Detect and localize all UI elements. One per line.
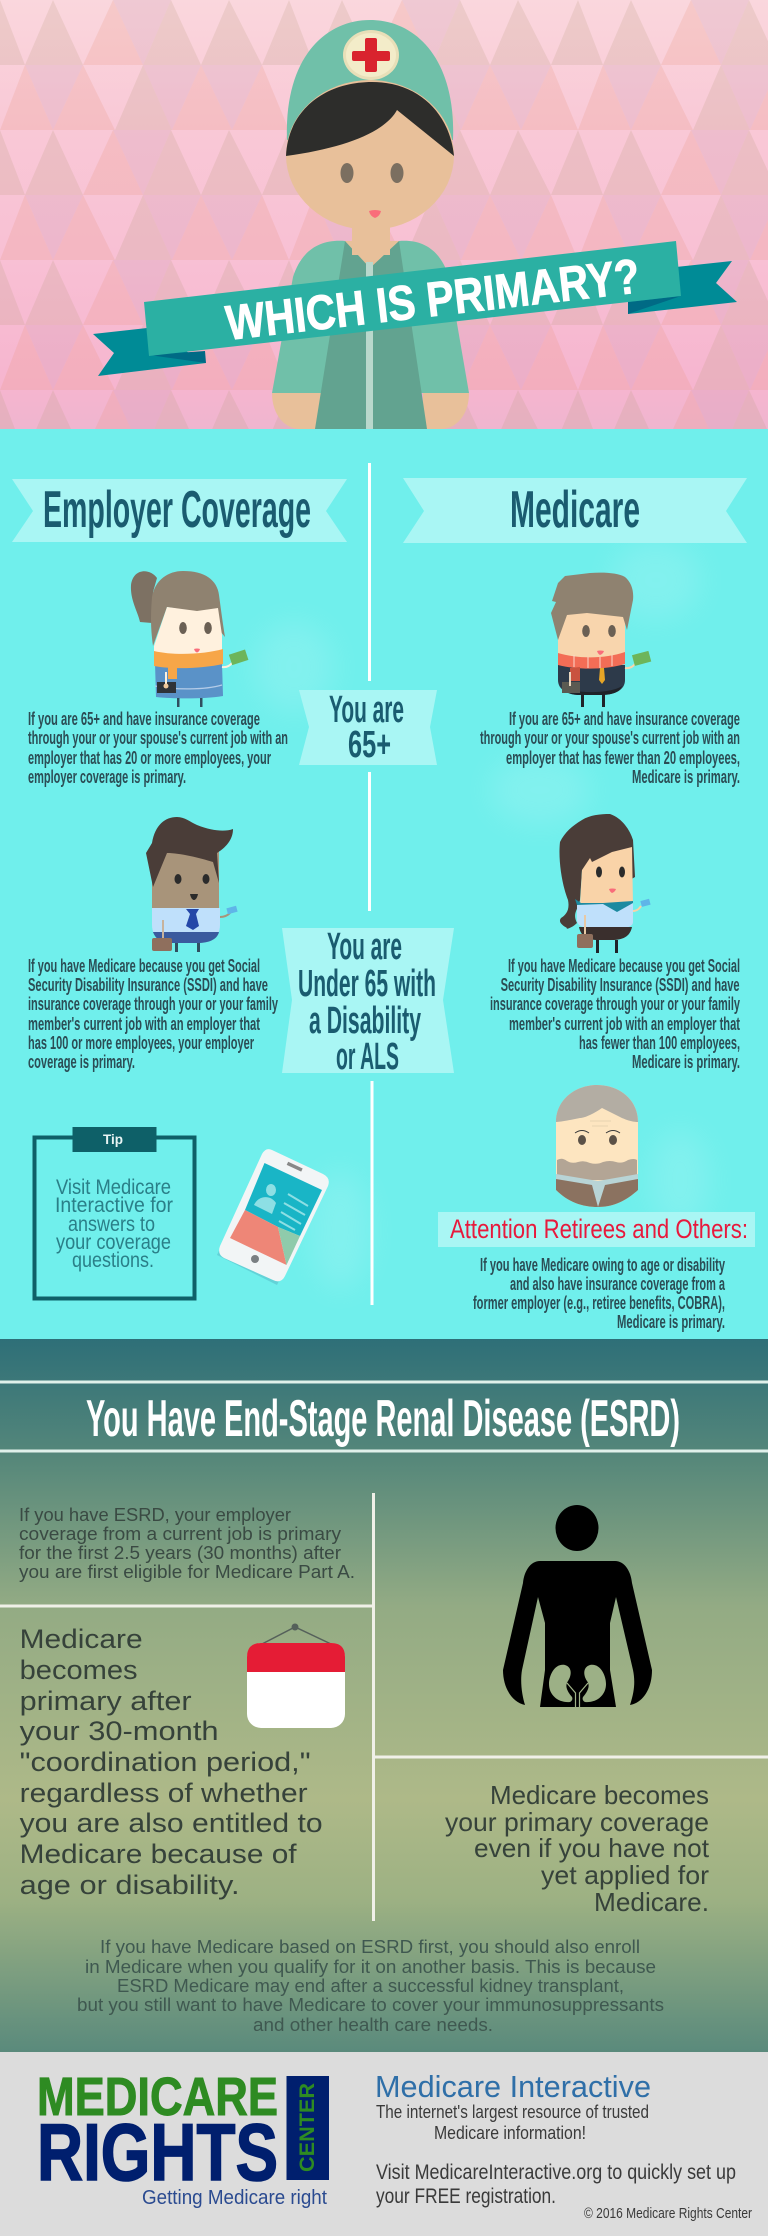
text: coordination period: your 30-month — [20, 1716, 219, 1746]
text: medicare disability — [490, 956, 740, 1072]
text: coordination period: Medicare because of — [20, 1839, 297, 1869]
icon: calendar — [247, 1624, 345, 1728]
label: you are 65+ — [299, 689, 437, 766]
tip box — [34, 1127, 194, 1298]
text: coordination period: Medicare — [20, 1624, 143, 1654]
tip box: questions. — [72, 1249, 154, 1272]
text: ESRD Medicare enrollment note: and other health care needs. — [253, 2015, 493, 2035]
text: ESRD employer coverage — [19, 1505, 355, 1582]
character: older man with beard — [556, 1085, 638, 1207]
text: employer 65+: If you are 65+ and have insurance coverage — [28, 709, 260, 729]
tip box: Interactive for — [55, 1194, 173, 1217]
text: medicare primary even if not applied: your primary coverage — [445, 1807, 709, 1837]
text: ESRD Medicare enrollment note: in Medicare when you qualify for it on another basis. This is because — [85, 1957, 656, 1977]
text: coordination period — [20, 1624, 323, 1900]
text: ESRD Medicare enrollment note: but you still want to have Medicare to cover your immunosuppressants — [77, 1995, 664, 2015]
heading: Medicare Interactive: Medicare Interactive — [375, 2069, 651, 2104]
character: woman with long hair — [559, 814, 651, 953]
logo: Medicare Rights Center — [37, 2067, 329, 2209]
logo: Medicare Rights Center: Getting Medicare right — [142, 2187, 327, 2209]
label: you are 65+: You are — [329, 689, 404, 731]
text: coordination period: "coordination period," — [20, 1747, 311, 1777]
text: medicare primary even if not applied — [445, 1780, 710, 1917]
nurse illustration — [272, 20, 469, 429]
text: medicare primary even if not applied: yet applied for — [541, 1860, 709, 1890]
character: man with tie — [146, 817, 238, 952]
logo: Medicare Rights Center: CENTER — [296, 2083, 319, 2172]
banner: medicare — [403, 478, 747, 543]
text: employer 65+: employer that has 20 or more employees, your — [28, 748, 271, 768]
text: ESRD employer coverage: you are first eligible for Medicare Part A. — [19, 1562, 355, 1582]
text: medicare primary even if not applied: even if you have not — [474, 1833, 710, 1863]
banner: employer coverage — [12, 479, 347, 542]
text: medicare primary even if not applied: Medicare becomes — [490, 1780, 709, 1810]
title ribbon — [93, 241, 737, 376]
text: coordination period: regardless of whether — [20, 1778, 308, 1808]
tip box: your coverage — [56, 1231, 171, 1254]
text: employer 65+: employer coverage is primary. — [28, 767, 186, 787]
hero background — [0, 0, 768, 429]
text: medicare primary even if not applied: Medicare. — [594, 1887, 709, 1917]
banner: employer coverage: Employer Coverage — [43, 481, 311, 539]
tip box: Visit Medicare — [56, 1176, 171, 1199]
panel: footer — [0, 2052, 768, 2236]
label: under 65 with a disability or ALS — [282, 926, 454, 1078]
text: employer 65+: through your or your spouse's current job with an — [28, 728, 288, 748]
text: employer disability: If you have Medicare because you get Social — [28, 956, 260, 976]
text: coordination period: you are also entitled to — [20, 1808, 323, 1838]
label: under 65 with a disability or ALS: a Disability — [309, 1000, 421, 1042]
text: retirees — [473, 1255, 726, 1332]
label: under 65 with a disability or ALS: You are — [327, 926, 402, 968]
character: woman with ponytail — [131, 571, 248, 707]
text: coordination period: primary after — [20, 1686, 192, 1716]
text: footer description: your FREE registration. — [376, 2185, 556, 2208]
text: footer description — [376, 2102, 736, 2208]
logo: Medicare Rights Center: RIGHTS — [37, 2108, 278, 2198]
icon: smartphone — [217, 1149, 329, 1285]
text: employer disability: member's current job with an employer that — [28, 1014, 260, 1034]
text: employer disability: coverage is primary. — [28, 1052, 135, 1072]
text: footer description: The internet's largest resource of trusted — [376, 2102, 649, 2122]
text: employer disability — [28, 956, 278, 1072]
text: medicare 65+ — [480, 709, 740, 787]
logo: Medicare Rights Center: MEDICARE — [37, 2067, 278, 2127]
nurse body — [272, 225, 469, 429]
text: employer 65+ — [28, 709, 288, 787]
tip box: Tip — [103, 1131, 123, 1147]
text: ESRD employer coverage: coverage from a current job is primary — [19, 1524, 341, 1544]
text: coordination period: becomes — [20, 1655, 138, 1685]
character: man with scarf — [551, 573, 651, 707]
panel: ESRD background — [0, 1339, 768, 2052]
label: you are 65+: 65+ — [348, 724, 391, 766]
label: under 65 with a disability or ALS: or ALS — [336, 1036, 399, 1078]
text: employer disability: insurance coverage through your or your family — [28, 994, 278, 1014]
title: WHICH IS PRIMARY? — [223, 249, 643, 351]
text: employer disability: has 100 or more employees, your employer — [28, 1033, 254, 1053]
text: footer description: Medicare information! — [434, 2123, 586, 2143]
text: ESRD Medicare enrollment note — [77, 1937, 664, 2035]
icon: body with kidneys — [503, 1505, 652, 1707]
nurse hat — [287, 20, 453, 140]
text: coordination period: age or disability. — [20, 1870, 240, 1900]
text: ESRD Medicare enrollment note: If you have Medicare based on ESRD first, you should also enroll — [100, 1937, 640, 1957]
banner: medicare: Medicare — [510, 481, 640, 539]
label: under 65 with a disability or ALS: Under 65 with — [298, 963, 436, 1005]
nurse head — [286, 80, 454, 230]
panel: coverage comparison background — [0, 429, 768, 1339]
text: employer disability: Security Disability Insurance (SSDI) and have — [28, 975, 268, 995]
text: ESRD employer coverage: If you have ESRD, your employer — [19, 1505, 291, 1525]
text: ESRD employer coverage: for the first 2.5 years (30 months) after — [19, 1543, 341, 1563]
text: ESRD Medicare enrollment note: ESRD Medicare may end after a successful kidney transplant, — [117, 1976, 624, 1996]
tip box: answers to — [68, 1213, 155, 1236]
